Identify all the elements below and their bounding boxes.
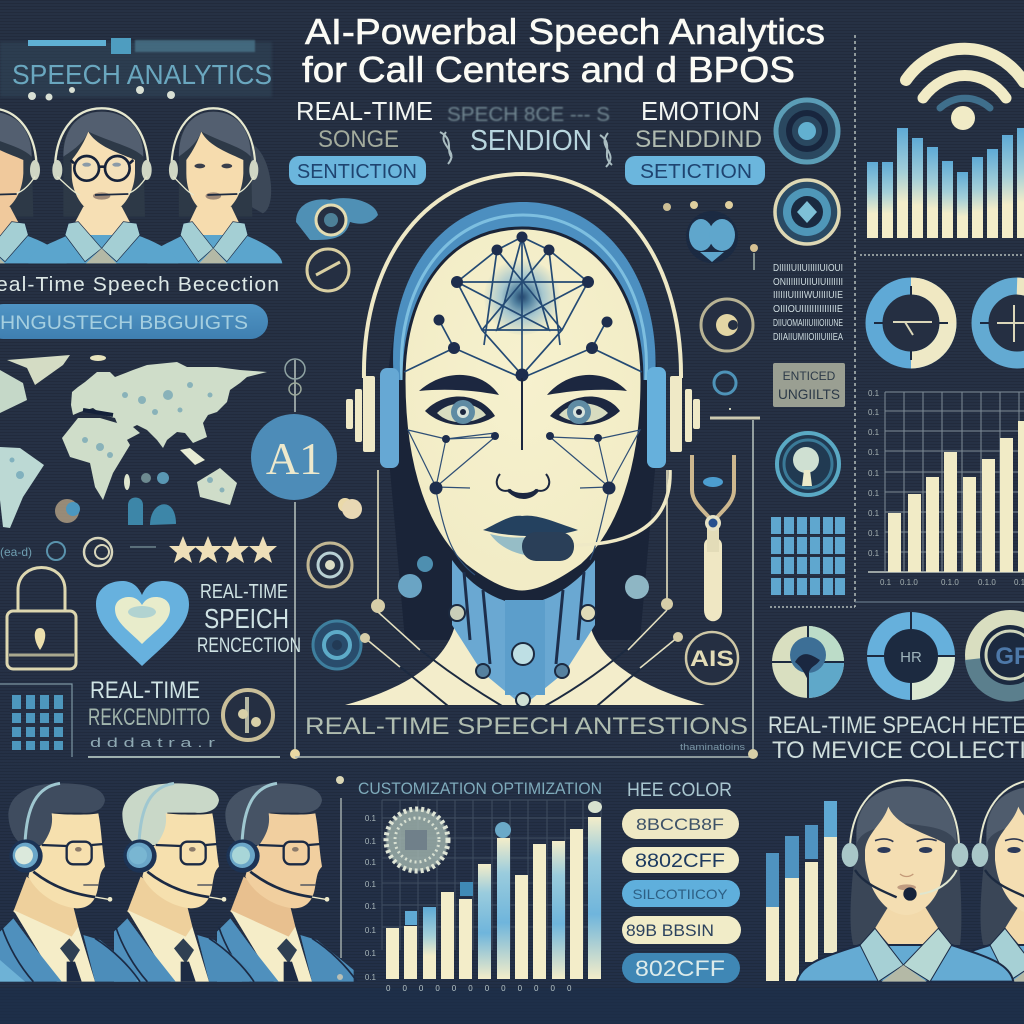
tiny text block: DIIUOMAIIIUIIIOIIUNE bbox=[773, 317, 843, 329]
donut large bbox=[867, 612, 955, 700]
pill one: 8BCCB8F bbox=[636, 815, 724, 834]
label: real-time speech recognition: eal-Time Speech Becection bbox=[0, 274, 280, 296]
heading: speech analytics top left: SPEECH ANALYTICS bbox=[12, 59, 272, 90]
tiny text block: ONIIIIIIUIIUIUIIIIIII bbox=[773, 276, 843, 288]
icon: padlock bbox=[7, 568, 76, 669]
pill: banner: HNGUSTECH BBGUIGTS bbox=[0, 313, 248, 334]
text: real-time speech recognition: REAL-TIME bbox=[200, 581, 288, 603]
AI badge bbox=[251, 359, 337, 757]
icon: data grid lower left bbox=[0, 684, 72, 757]
bar chart bottom centre: 000000000000 bbox=[386, 984, 583, 993]
bar chart with grid mid right: 0.1 bbox=[868, 469, 880, 478]
lips bbox=[483, 516, 578, 536]
man two bbox=[114, 783, 254, 982]
donut gauges bbox=[874, 286, 1024, 360]
bar chart with grid mid right bbox=[868, 389, 1024, 587]
pill four: 89B BBSIN bbox=[626, 921, 714, 940]
subheading: speech sentiment: SENDION bbox=[470, 125, 592, 157]
agent left partial bbox=[0, 108, 67, 263]
brain network bbox=[404, 232, 642, 382]
donut large: HR bbox=[900, 649, 922, 666]
neck bbox=[452, 560, 595, 706]
main title: for Call Centers and d BPOS bbox=[302, 49, 795, 90]
hex colour legend: HEE COLOR bbox=[627, 780, 732, 801]
panel dividers right bbox=[770, 35, 1024, 607]
pill: banner bbox=[0, 304, 268, 339]
text: real-time recognition: d d d a t r a . r bbox=[90, 735, 216, 750]
donut two bbox=[980, 286, 1024, 360]
bar chart with grid mid right: 0.1 bbox=[868, 509, 880, 518]
man three bbox=[217, 783, 357, 982]
decorative icons left of head bbox=[296, 198, 378, 669]
AI badge: A1 bbox=[266, 433, 322, 484]
call agents bottom left bbox=[0, 776, 357, 982]
text: real-time recognition bbox=[88, 677, 280, 757]
subheading: emotion: SENDDIND bbox=[635, 126, 762, 153]
label box: untitled analytics: UNGIILTS bbox=[778, 386, 840, 402]
tiny text block: IIIIIIUIIIIWUIIIIUIE bbox=[773, 289, 843, 301]
bar chart bottom centre: 0.1 bbox=[365, 837, 377, 846]
pill four bbox=[622, 916, 741, 944]
agent centre bbox=[797, 780, 1013, 982]
subheading: speech sentiment bbox=[440, 104, 612, 167]
world map bbox=[0, 355, 267, 528]
rings top right bbox=[775, 100, 839, 244]
bar chart with grid mid right: 0.1 bbox=[868, 448, 880, 457]
bar chart bottom centre: 0.1 bbox=[365, 973, 377, 982]
donut one bbox=[874, 286, 948, 360]
icon: heart bbox=[96, 581, 189, 666]
centre panel caption bbox=[295, 420, 758, 759]
bar chart with grid mid right: 0.1.0 bbox=[941, 578, 959, 587]
pill five bbox=[622, 953, 740, 983]
icons right of head bbox=[663, 201, 760, 418]
ring icon mid right bbox=[777, 433, 839, 495]
pill three bbox=[622, 880, 740, 907]
caption lower right bbox=[768, 712, 1024, 764]
badge: AIS bbox=[686, 632, 738, 684]
subheading: emotion bbox=[625, 96, 765, 185]
bar chart with grid mid right: 0.1 bbox=[868, 428, 880, 437]
badge: AIS: AIS bbox=[690, 646, 734, 671]
bar chart with grid mid right: 0.1 bbox=[868, 549, 880, 558]
tiny text block: DIIIIIUIIUIIIIIUIOUI bbox=[773, 262, 843, 274]
bar chart top right bbox=[867, 128, 1024, 238]
bar chart bottom centre: 0.1 bbox=[365, 858, 377, 867]
face bbox=[404, 228, 642, 592]
man one bbox=[0, 783, 140, 982]
centre panel caption: REAL-TIME SPEECH ANTESTIONS bbox=[305, 713, 748, 740]
blue grid bbox=[771, 517, 845, 595]
hex colour legend bbox=[622, 780, 741, 983]
subheading: speech sentiment: SPECH 8CE --- S bbox=[447, 104, 610, 126]
label box: untitled analytics: ENTICED bbox=[783, 369, 836, 383]
bar chart with grid mid right: 0.1 bbox=[880, 578, 892, 587]
bar chart bottom centre: 0.1 bbox=[365, 902, 377, 911]
bar chart bottom centre: 0.1 bbox=[365, 814, 377, 823]
tiny text block: OIIIOUIIIIIIIIIIIIIIE bbox=[773, 303, 843, 315]
rating stars bbox=[169, 536, 277, 563]
small icon row below map bbox=[0, 472, 176, 566]
bar chart with grid mid right: 0.1 bbox=[868, 489, 880, 498]
bar chart with grid mid right: 0.1 bbox=[868, 529, 880, 538]
pill five: 802CFF bbox=[635, 956, 725, 981]
text: real-time speech recognition: RENCECTION bbox=[197, 634, 301, 657]
bar chart bottom centre: CUSTOMIZATION OPTIMIZATION bbox=[358, 779, 602, 798]
donut partial bbox=[965, 610, 1024, 702]
call agents bottom right bbox=[797, 780, 1024, 982]
subheading: real-time: REAL-TIME bbox=[296, 96, 433, 126]
bar chart bottom centre: 0.1 bbox=[365, 926, 377, 935]
tiny text block bbox=[773, 262, 843, 343]
tiny text block: DIIAIIUMIIOIIIUIIIEA bbox=[773, 331, 843, 343]
main title: AI-Powerbal Speech Analytics bbox=[305, 11, 825, 52]
bar chart with grid mid right: 0.1 bbox=[868, 408, 880, 417]
main title bbox=[302, 11, 825, 90]
text: real-time speech recognition bbox=[197, 581, 301, 657]
dark hair behind face bbox=[386, 210, 660, 640]
text: real-time speech recognition: SPEICH bbox=[204, 603, 289, 634]
headset on central face bbox=[346, 174, 700, 561]
bar chart with grid mid right: 0.1.0 bbox=[978, 578, 996, 587]
blue hair band bbox=[393, 202, 656, 380]
brows bbox=[419, 375, 499, 395]
agent centre with glasses bbox=[28, 108, 178, 263]
shoulders bbox=[345, 625, 705, 705]
icon: tuning fork bbox=[692, 455, 734, 621]
pill two bbox=[622, 847, 739, 873]
pill three: SILCOTIICOY bbox=[632, 886, 728, 902]
wires and nodes around neck bbox=[342, 470, 683, 706]
text: real-time recognition: REAL-TIME bbox=[90, 677, 200, 704]
donut small bbox=[772, 626, 844, 698]
chip graphic bbox=[386, 809, 448, 871]
bar chart with grid mid right: 0.1.0 bbox=[900, 578, 918, 587]
subheading: emotion: EMOTION bbox=[641, 96, 760, 126]
icon: wifi bbox=[906, 49, 1024, 130]
bar chart bottom centre bbox=[358, 779, 602, 993]
eyes bbox=[425, 397, 495, 425]
agents top left bbox=[0, 108, 282, 263]
central AI face bbox=[345, 202, 705, 707]
subheading: real-time bbox=[289, 96, 433, 185]
small icon row below map: (ea-d) bbox=[0, 545, 32, 559]
pill two: 8802CFF bbox=[635, 851, 725, 872]
nose bbox=[497, 378, 549, 496]
agent far right bbox=[927, 780, 1024, 982]
pill one bbox=[622, 809, 739, 839]
agent right bbox=[147, 108, 282, 263]
stacked bars bottom right bbox=[766, 801, 837, 981]
label box: untitled analytics bbox=[773, 363, 845, 407]
icon: circular badge lower left bbox=[223, 690, 300, 759]
bar chart bottom centre: 0.1 bbox=[365, 880, 377, 889]
subheading: emotion: SETICTION bbox=[640, 161, 752, 183]
centre panel caption: thaminatioins bbox=[680, 742, 746, 752]
bar chart bottom centre: 0.1 bbox=[365, 949, 377, 958]
caption lower right: TO MEVICE COLLECTI bbox=[772, 737, 1024, 764]
donut row lower right bbox=[772, 610, 1024, 702]
text: real-time recognition: REKCENDITTO bbox=[88, 704, 210, 731]
subheading: real-time: SENTICTION bbox=[297, 161, 417, 183]
subheading: real-time: SONGE bbox=[318, 126, 399, 153]
bars bbox=[386, 817, 601, 979]
bar chart with grid mid right: 0.1 bbox=[868, 389, 880, 398]
heading: speech analytics top left bbox=[0, 38, 272, 100]
cheek networks bbox=[408, 430, 640, 575]
neck beads bbox=[449, 605, 596, 707]
